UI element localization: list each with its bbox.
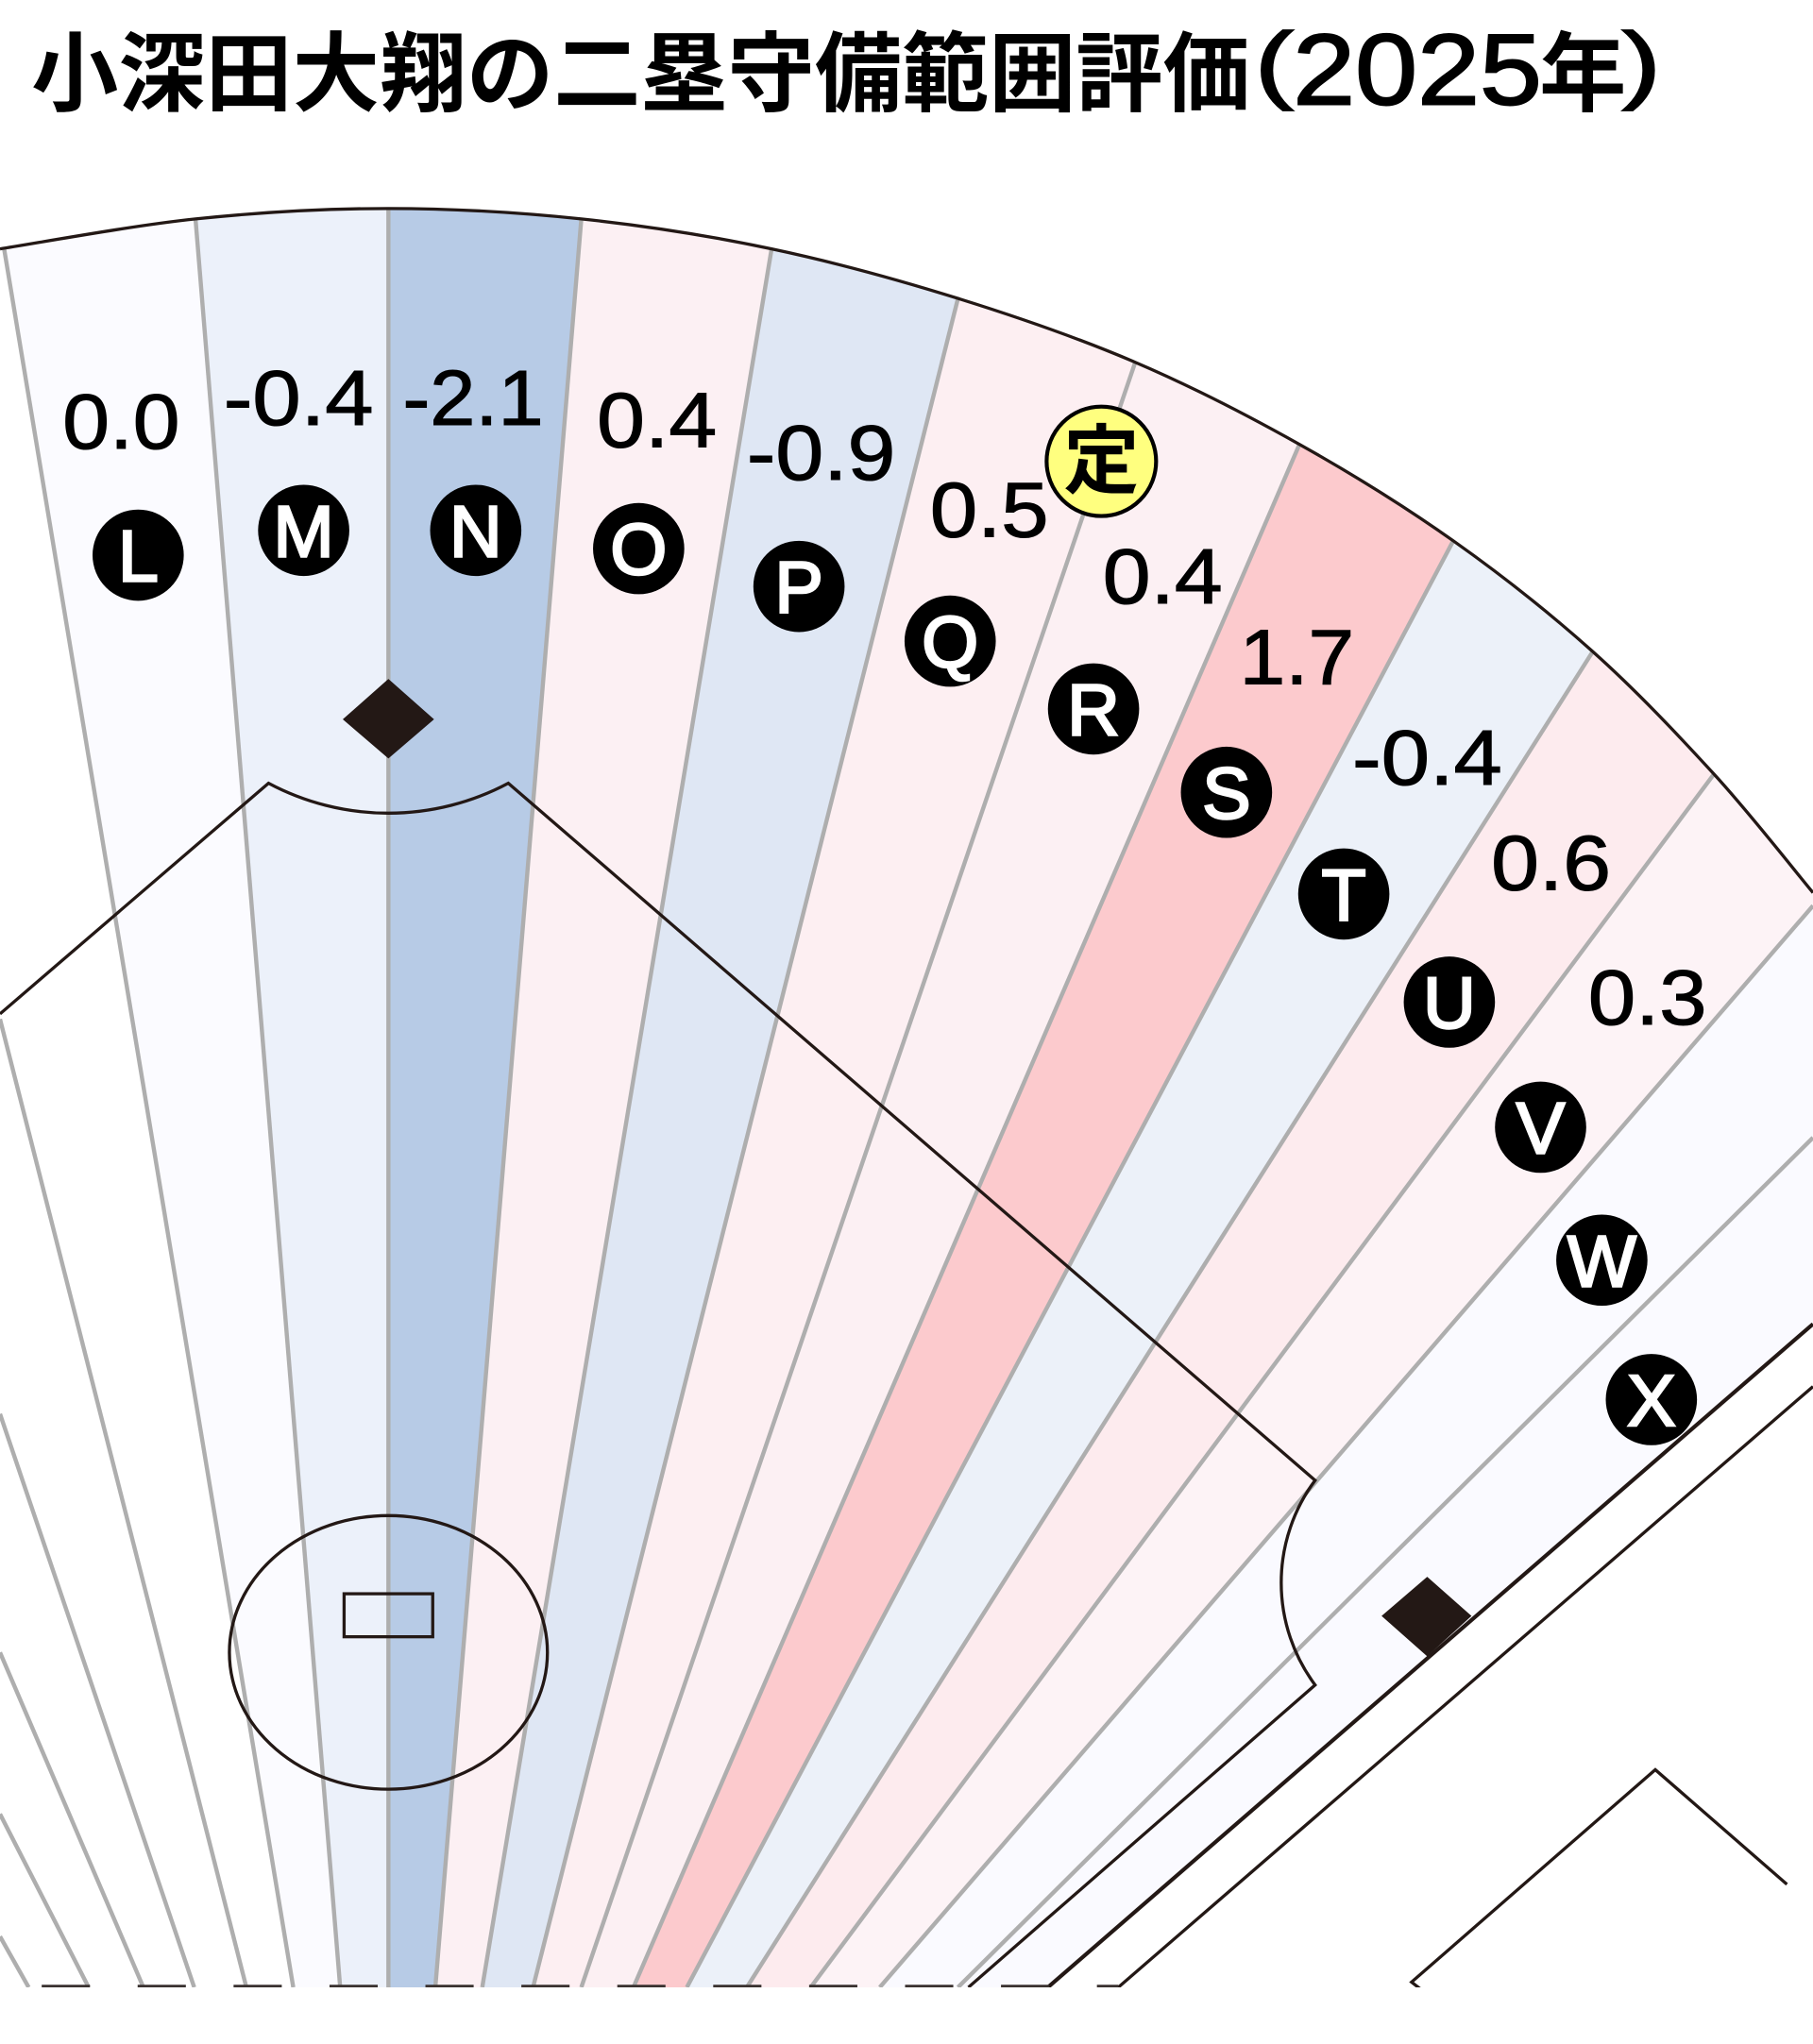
zone letter badges: V (1516, 1089, 1566, 1170)
title: 年 (1539, 25, 1626, 123)
zone letter badges: T (1321, 854, 1366, 936)
zone value labels: -0.4 (1352, 714, 1502, 802)
zone wedge fills (198, 210, 1813, 1987)
zone letter badges: P (774, 548, 823, 629)
zone letter badges: X (1627, 1360, 1676, 1442)
zone value labels: 0.5 (930, 466, 1048, 554)
zone value labels: 0.6 (1491, 819, 1611, 907)
zone value labels: -0.9 (747, 409, 895, 497)
zone letter badges: Q (922, 602, 978, 684)
title: 小深田大翔の二塁守備範囲評価 (31, 25, 1250, 123)
zone value labels: 0.4 (597, 376, 717, 464)
zone letter badges: R (1067, 669, 1120, 751)
pitcher mound circle (229, 1515, 548, 1789)
zone value labels: -2.1 (403, 354, 544, 442)
zone letter badges: L (118, 516, 159, 598)
zone letter badges: W (1567, 1221, 1636, 1302)
title: 2025 (1293, 13, 1542, 126)
bottom dashed line (42, 1985, 1118, 1987)
zone letter badges (93, 484, 1697, 1445)
zone value labels (62, 354, 1707, 1041)
infield outline (0, 784, 1315, 1987)
pitcher plate (344, 1594, 432, 1637)
title: ( (1255, 16, 1294, 111)
regular position marker 定 (1046, 407, 1156, 516)
title (31, 13, 1661, 126)
first base (1381, 1577, 1471, 1656)
zone value labels: 0.3 (1588, 954, 1707, 1041)
zone value labels: -0.4 (224, 354, 373, 442)
title: ) (1622, 16, 1661, 111)
zone value labels: 0.0 (62, 378, 179, 465)
right foul line (1048, 1324, 1813, 1987)
zone value labels: 1.7 (1240, 614, 1354, 701)
zone letter badges: U (1423, 963, 1476, 1044)
regular position marker 定: 定 (1063, 419, 1139, 503)
zone letter badges: O (610, 510, 667, 591)
zone letter badges: N (449, 491, 502, 572)
second base (343, 679, 434, 758)
outer foul line (1118, 1387, 1813, 1987)
zone letter badges: M (273, 491, 334, 572)
zone letter badges: S (1202, 753, 1251, 835)
zone value labels: 0.4 (1103, 532, 1223, 620)
stands outline (1412, 1769, 1787, 1991)
outfield fence arc (0, 209, 1813, 893)
